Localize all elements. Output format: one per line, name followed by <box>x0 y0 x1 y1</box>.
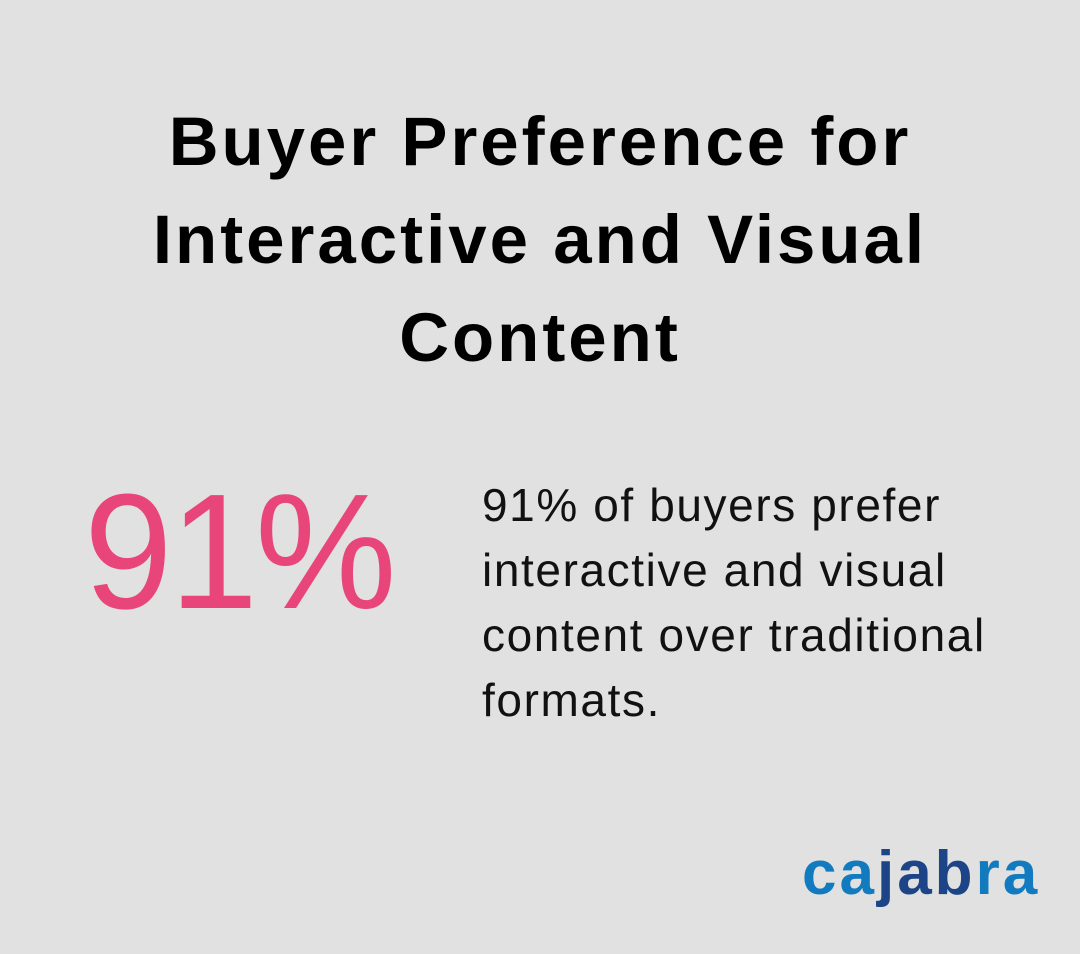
title: Content <box>399 299 681 376</box>
description text <box>482 479 986 726</box>
logo: cajabra: cajabra <box>802 839 1040 908</box>
title <box>153 103 927 376</box>
title: Buyer Preference for <box>169 103 911 180</box>
description text: 91% of buyers prefer <box>482 479 941 531</box>
description text: interactive and visual <box>482 544 947 596</box>
title: Interactive and Visual <box>153 201 927 278</box>
description text: formats. <box>482 674 661 726</box>
big stat: 91% <box>84 460 394 643</box>
description text: content over traditional <box>482 609 986 661</box>
